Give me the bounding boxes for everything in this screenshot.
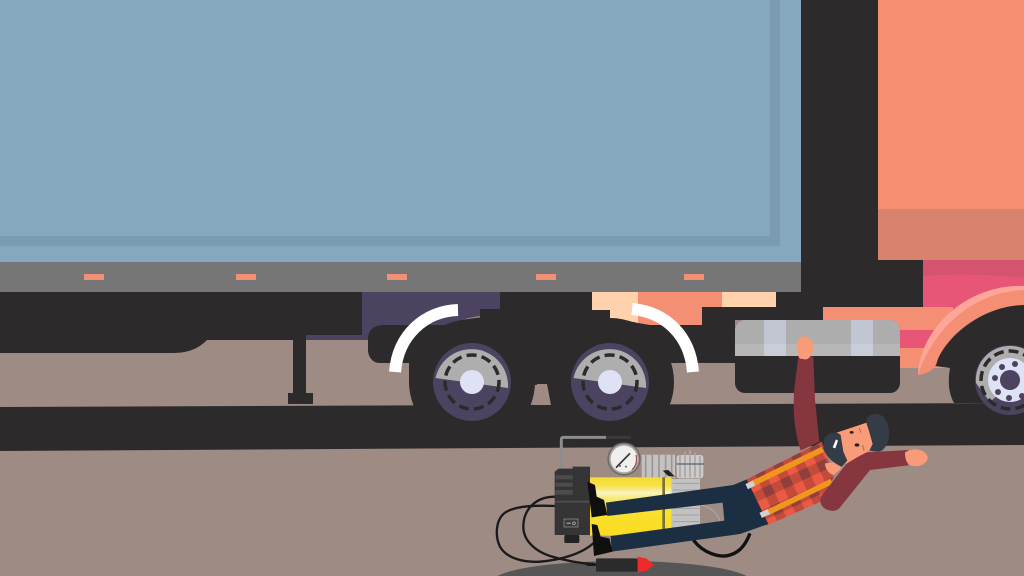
- power cables: [497, 497, 750, 564]
- compressor housing: [555, 467, 590, 543]
- compressor handle: [561, 437, 631, 473]
- toolbox: [735, 320, 900, 393]
- landing leg: [288, 338, 313, 404]
- compressor cylinder: [590, 477, 720, 536]
- ground shadow: [492, 561, 752, 576]
- trailer marker lights: [84, 274, 704, 280]
- pressure gauge: [607, 442, 641, 476]
- rear wheel arch and tyres: [368, 317, 674, 446]
- road band: [0, 403, 1024, 451]
- trailer body: [0, 0, 801, 292]
- air compressor and man, drawn in zoomed coordinates: [497, 336, 928, 573]
- rear wheel 2: [571, 343, 649, 421]
- rear wheel 1: [433, 343, 511, 421]
- compressor cooling fins: [642, 450, 704, 478]
- dark gap between trailer and cab: [702, 0, 923, 363]
- man: boots: [587, 482, 613, 556]
- cigarette lighter plug: [587, 557, 654, 573]
- white mudguard arcs: [395, 309, 693, 372]
- cab: [823, 0, 1024, 368]
- man: shirt: [747, 442, 834, 526]
- trailer underside: [0, 292, 776, 363]
- man: head: [823, 414, 889, 467]
- man: suspenders: [747, 449, 832, 515]
- front wheel and fender: [918, 286, 1024, 415]
- man: neck and near arm: [820, 449, 928, 511]
- man: trousers: [606, 479, 768, 552]
- man: far arm raised to toolbox: [794, 336, 819, 451]
